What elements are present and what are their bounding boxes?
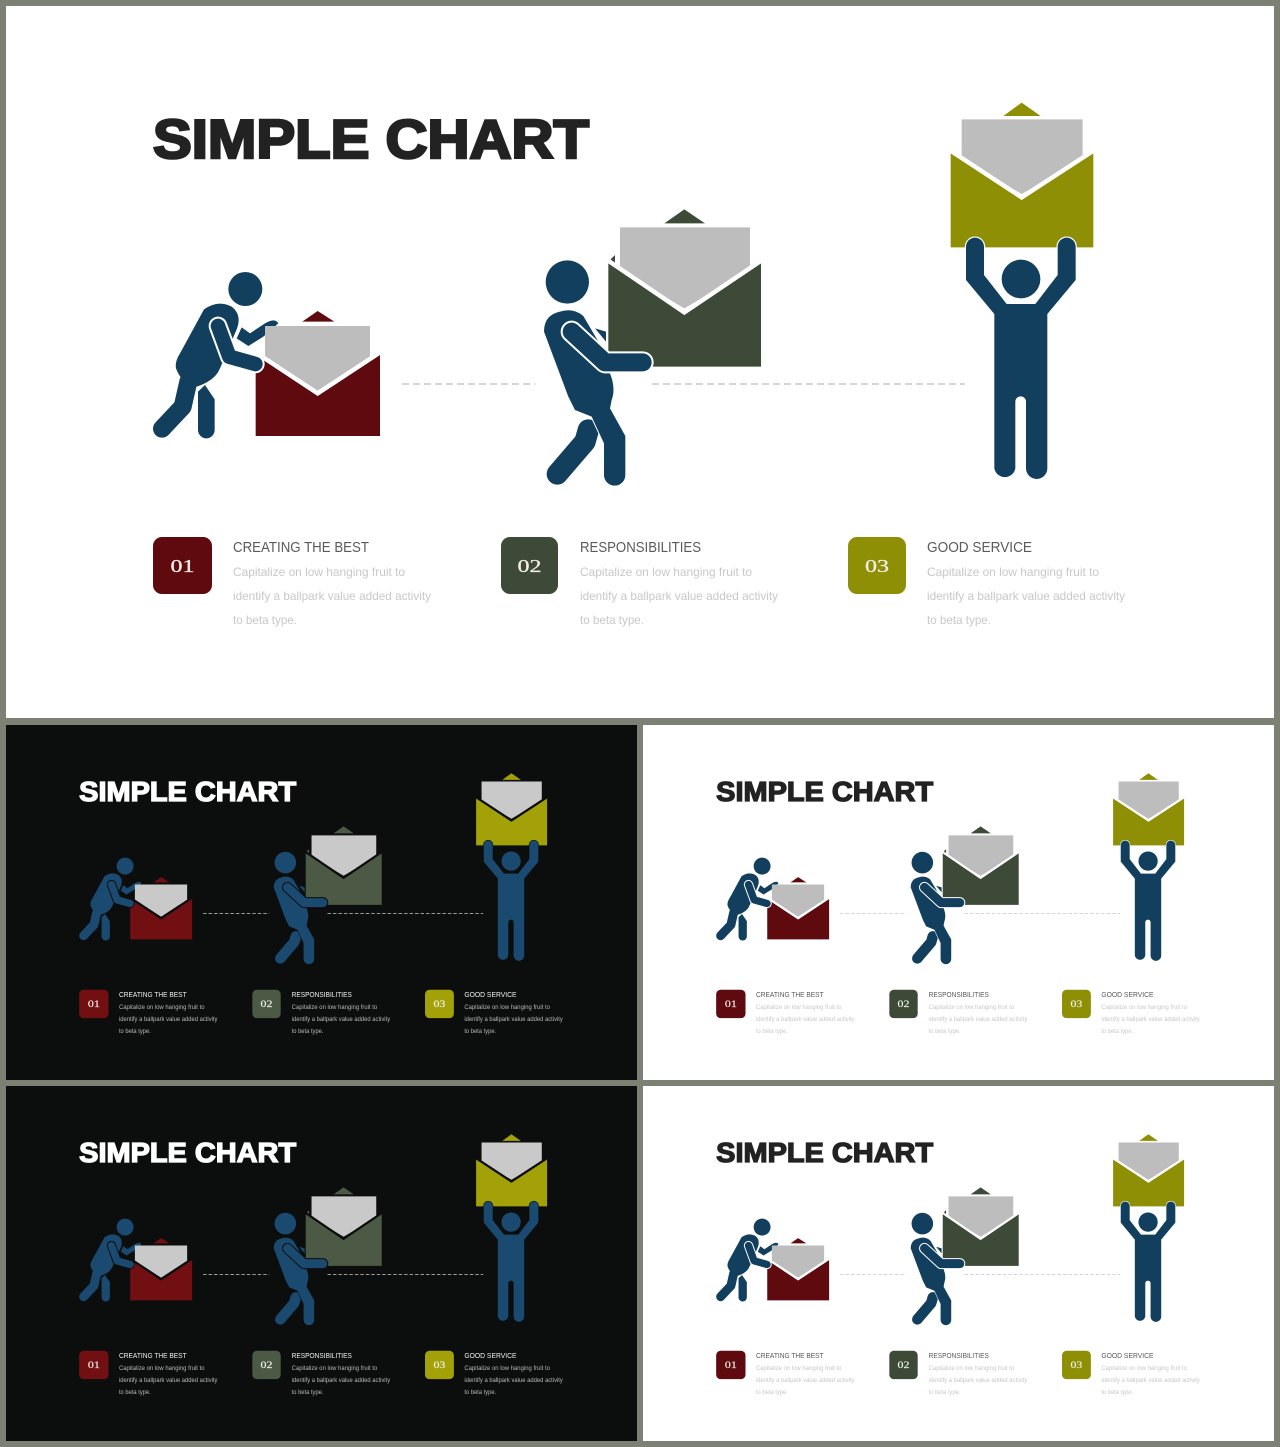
- icon: figure carrying green envelope: [911, 826, 1019, 964]
- icon: figure carrying green envelope: [544, 209, 761, 486]
- step 01: CREATING THE BEST: [233, 539, 369, 556]
- step 02: identify a ballpark value added activity: [580, 589, 778, 603]
- step 01: CREATING THE BEST: [119, 990, 187, 999]
- step 02: identify a ballpark value added activity: [929, 1378, 1027, 1384]
- icon: figure pushing red envelope: [721, 858, 829, 941]
- step 02: RESPONSIBILITIES: [292, 1351, 352, 1360]
- title: SIMPLE CHART: [79, 776, 296, 807]
- icon: figure lifting olive envelope: [1113, 773, 1184, 961]
- dashed connector: step 1 to 2: [840, 1273, 906, 1275]
- step 02: to beta type.: [292, 1029, 324, 1035]
- step 01: Capitalize on low hanging fruit to: [119, 1366, 205, 1372]
- step 03: [848, 537, 1125, 627]
- step 02: 02: [898, 999, 909, 1009]
- step 01: to beta type.: [233, 613, 297, 627]
- title: SIMPLE CHART: [153, 108, 589, 170]
- icon: figure lifting olive envelope: [951, 103, 1093, 479]
- step 03: identify a ballpark value added activity: [1101, 1017, 1200, 1023]
- step 01: identify a ballpark value added activity: [756, 1017, 854, 1023]
- icon: figure lifting olive envelope: [1113, 1134, 1184, 1322]
- step 01: CREATING THE BEST: [119, 1351, 187, 1360]
- step 01: identify a ballpark value added activity: [756, 1378, 854, 1384]
- step 01: CREATING THE BEST: [756, 990, 824, 999]
- step 01: [79, 990, 217, 1035]
- step 01: to beta type.: [119, 1390, 151, 1396]
- step 03: 03: [865, 556, 889, 576]
- step 02: 02: [898, 1360, 909, 1370]
- step 02: 02: [518, 556, 542, 576]
- step 02: RESPONSIBILITIES: [292, 990, 352, 999]
- step 03: to beta type.: [1101, 1390, 1133, 1396]
- step 02: [501, 537, 778, 627]
- dashed connector: step 2 to 3: [327, 1273, 483, 1275]
- step 03: GOOD SERVICE: [1101, 990, 1154, 999]
- title: SIMPLE CHART: [716, 1137, 933, 1168]
- panel: white slide top right: [643, 725, 1274, 1080]
- step 03: 03: [433, 1360, 446, 1370]
- step 01: 01: [725, 999, 737, 1009]
- step 02: to beta type.: [292, 1390, 324, 1396]
- step 02: RESPONSIBILITIES: [929, 990, 989, 999]
- step 01: Capitalize on low hanging fruit to: [756, 1005, 842, 1011]
- step 03: [425, 990, 563, 1035]
- step 02: identify a ballpark value added activity: [292, 1378, 390, 1384]
- step 03: GOOD SERVICE: [927, 539, 1032, 556]
- step 03: identify a ballpark value added activity: [464, 1378, 563, 1384]
- dashed connector: step 2 to 3: [964, 1273, 1120, 1275]
- step 01: Capitalize on low hanging fruit to: [119, 1005, 205, 1011]
- step 01: identify a ballpark value added activity: [119, 1017, 217, 1023]
- step 01: Capitalize on low hanging fruit to: [233, 565, 405, 579]
- step 02: identify a ballpark value added activity: [929, 1017, 1027, 1023]
- step 03: to beta type.: [464, 1029, 496, 1035]
- dashed connector: step 1 to 2: [840, 912, 906, 914]
- step 02: to beta type.: [580, 613, 644, 627]
- step 03: Capitalize on low hanging fruit to: [464, 1005, 551, 1011]
- dashed connector: step 2 to 3: [327, 912, 483, 914]
- step 01: Capitalize on low hanging fruit to: [756, 1366, 842, 1372]
- title: SIMPLE CHART: [716, 776, 933, 807]
- dashed connector: step 1 to 2: [203, 912, 269, 914]
- step 03: Capitalize on low hanging fruit to: [464, 1366, 551, 1372]
- icon: figure pushing red envelope: [84, 1219, 192, 1302]
- step 02: Capitalize on low hanging fruit to: [292, 1366, 378, 1372]
- icon: figure pushing red envelope: [721, 1219, 829, 1302]
- step 03: [425, 1351, 563, 1396]
- step 02: [252, 990, 390, 1035]
- step 03: Capitalize on low hanging fruit to: [927, 565, 1099, 579]
- step 03: 03: [1070, 999, 1083, 1009]
- step 02: RESPONSIBILITIES: [929, 1351, 989, 1360]
- step 03: Capitalize on low hanging fruit to: [1101, 1366, 1188, 1372]
- step 01: 01: [725, 1360, 737, 1370]
- step 03: to beta type.: [927, 613, 991, 627]
- step 02: Capitalize on low hanging fruit to: [929, 1005, 1015, 1011]
- icon: figure pushing red envelope: [162, 272, 380, 438]
- step 01: CREATING THE BEST: [756, 1351, 824, 1360]
- step 03: [1062, 1351, 1200, 1396]
- step 01: identify a ballpark value added activity: [233, 589, 431, 603]
- step 01: [79, 1351, 217, 1396]
- step 01: [153, 537, 431, 627]
- step 02: Capitalize on low hanging fruit to: [929, 1366, 1015, 1372]
- step 02: identify a ballpark value added activity: [292, 1017, 390, 1023]
- panel: main white slide: [6, 6, 1274, 718]
- step 03: Capitalize on low hanging fruit to: [1101, 1005, 1188, 1011]
- step 02: RESPONSIBILITIES: [580, 539, 701, 556]
- icon: figure carrying green envelope: [911, 1187, 1019, 1325]
- icon: figure lifting olive envelope: [476, 773, 547, 961]
- dashed connector: step 2 to 3: [964, 912, 1120, 914]
- step 03: identify a ballpark value added activity: [464, 1017, 563, 1023]
- step 03: identify a ballpark value added activity: [927, 589, 1125, 603]
- dashed connector: step 1 to 2: [402, 383, 535, 385]
- step 03: identify a ballpark value added activity: [1101, 1378, 1200, 1384]
- step 01: [716, 990, 854, 1035]
- step 01: to beta type.: [756, 1390, 788, 1396]
- step 03: GOOD SERVICE: [1101, 1351, 1154, 1360]
- step 01: to beta type.: [119, 1029, 151, 1035]
- step 02: [889, 1351, 1027, 1396]
- step 03: [1062, 990, 1200, 1035]
- step 03: to beta type.: [464, 1390, 496, 1396]
- step 02: 02: [261, 1360, 272, 1370]
- step 01: 01: [88, 1360, 100, 1370]
- step 03: 03: [433, 999, 446, 1009]
- step 02: 02: [261, 999, 272, 1009]
- dashed connector: step 2 to 3: [652, 383, 965, 385]
- title: SIMPLE CHART: [79, 1137, 296, 1168]
- step 02: Capitalize on low hanging fruit to: [292, 1005, 378, 1011]
- step 01: identify a ballpark value added activity: [119, 1378, 217, 1384]
- step 02: [252, 1351, 390, 1396]
- step 03: GOOD SERVICE: [464, 1351, 517, 1360]
- icon: figure lifting olive envelope: [476, 1134, 547, 1322]
- panel: dark slide bottom left: [6, 1086, 637, 1441]
- panel: white slide bottom right: [643, 1086, 1274, 1441]
- icon: figure carrying green envelope: [274, 1187, 382, 1325]
- step 03: GOOD SERVICE: [464, 990, 517, 999]
- icon: figure carrying green envelope: [274, 826, 382, 964]
- step 01: 01: [88, 999, 100, 1009]
- step 03: to beta type.: [1101, 1029, 1133, 1035]
- step 02: [889, 990, 1027, 1035]
- step 01: [716, 1351, 854, 1396]
- step 02: to beta type.: [929, 1390, 961, 1396]
- panel: dark slide top left: [6, 725, 637, 1080]
- icon: figure pushing red envelope: [84, 858, 192, 941]
- step 03: 03: [1070, 1360, 1083, 1370]
- step 02: Capitalize on low hanging fruit to: [580, 565, 752, 579]
- step 02: to beta type.: [929, 1029, 961, 1035]
- step 01: 01: [170, 556, 194, 576]
- dashed connector: step 1 to 2: [203, 1273, 269, 1275]
- step 01: to beta type.: [756, 1029, 788, 1035]
